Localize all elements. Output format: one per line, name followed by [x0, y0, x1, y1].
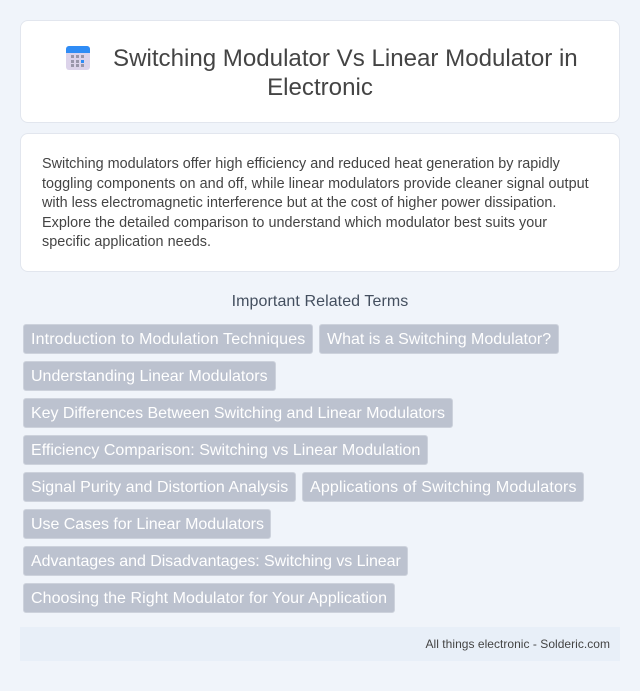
tag list [23, 324, 584, 613]
title: Electronic [267, 74, 373, 101]
tag: Key Differences Between Switching and Linear Modulators [31, 405, 445, 422]
panel: description card [20, 133, 620, 272]
tag: Advantages and Disadvantages: Switching vs Linear [31, 553, 401, 570]
title: Switching Modulator Vs Linear Modulator in [113, 45, 578, 72]
tag [23, 324, 313, 354]
tag [23, 546, 408, 576]
tag: What is a Switching Modulator? [327, 331, 551, 348]
panel: header card [20, 20, 620, 123]
tag [23, 583, 395, 613]
tag: Applications of Switching Modulators [310, 479, 577, 496]
tag [23, 361, 276, 391]
heading: important related terms: Important Related Terms [232, 293, 408, 310]
footer [20, 627, 620, 661]
tag: Understanding Linear Modulators [31, 368, 268, 385]
tag [23, 398, 453, 428]
footer text: All things electronic - Solderic.com [426, 637, 610, 651]
tag [302, 472, 584, 502]
tag [23, 472, 296, 502]
description text: toggling components on and off, while linear modulators provide cleaner signal output [42, 176, 589, 192]
description text: Switching modulators offer high efficiency and reduced heat generation by rapidly [42, 156, 560, 172]
icon: calendar [66, 46, 90, 70]
description text: Explore the detailed comparison to understand which modulator best suits your [42, 214, 547, 230]
tag [23, 509, 271, 539]
title [113, 45, 578, 101]
tag: Introduction to Modulation Techniques [31, 331, 305, 348]
tag [319, 324, 559, 354]
tag: Signal Purity and Distortion Analysis [31, 479, 288, 496]
description text: specific application needs. [42, 234, 211, 250]
tag: Use Cases for Linear Modulators [31, 516, 264, 533]
description text: with less electromagnetic interference but at the cost of higher power dissipation. [42, 195, 556, 211]
tag [23, 435, 428, 465]
description text [42, 156, 589, 250]
tag: Choosing the Right Modulator for Your Application [31, 590, 387, 607]
tag: Efficiency Comparison: Switching vs Linear Modulation [31, 442, 420, 459]
